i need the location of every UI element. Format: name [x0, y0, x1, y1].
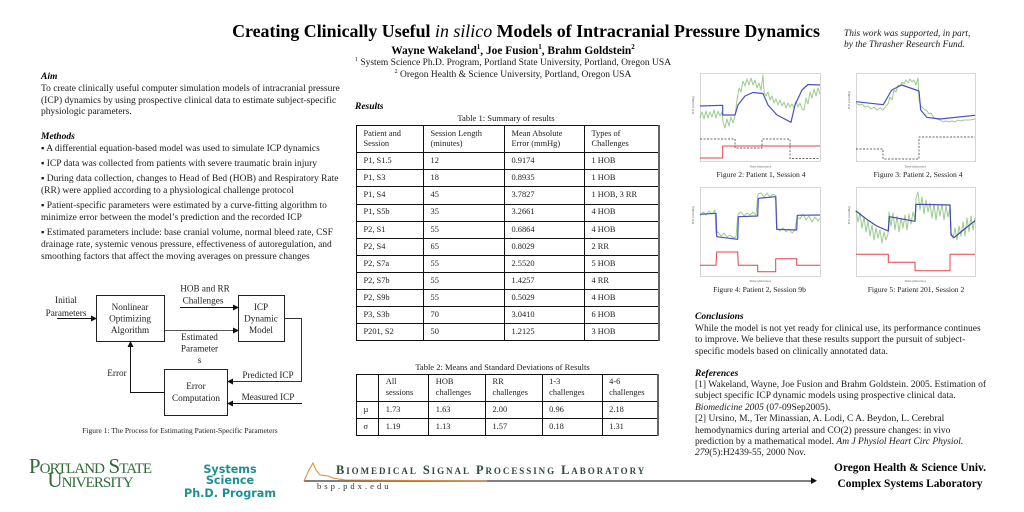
panel: references: References — [695, 368, 738, 378]
flow diagram: figure 1: Dynamic — [244, 314, 278, 324]
panel: methods — [40, 132, 339, 262]
logo: Systems Science Ph.D. Program: Systems — [203, 463, 257, 476]
table 1: summary of results: Error (mmHg) — [512, 139, 560, 148]
table 2: means and standard deviations: 1.19 — [386, 422, 400, 431]
table 1: summary of results: 3.7827 — [512, 190, 535, 199]
panel: methods: minimize error between the model’s prediction and the recorded ICP — [41, 213, 302, 223]
table 1: summary of results: 55 — [430, 293, 439, 302]
table 1: summary of results: 4 HOB — [592, 225, 615, 234]
OHSU lab label: Oregon Health & Science Univ. — [834, 462, 986, 474]
funding note: by the Thrasher Research Fund. — [844, 40, 965, 50]
flow diagram: figure 1: s — [198, 355, 202, 365]
table 1: summary of results: (minutes) — [430, 139, 463, 148]
logo: Systems Science Ph.D. Program: Ph.D. Program — [184, 487, 276, 500]
table 2 caption: Table 2: Means and Standard Deviations of Results — [415, 362, 590, 372]
table 1: summary of results: 4 RR — [592, 276, 609, 285]
table 2: means and standard deviations: 1.57 — [492, 422, 507, 431]
panel: conclusions: Conclusions — [695, 312, 744, 322]
panel: aim: (ICP) dynamics by using prospective clinical data to estimate subject-specific — [41, 96, 336, 106]
table 1: summary of results: 0.6864 — [512, 225, 535, 234]
table 1: summary of results: P1, S4 — [364, 190, 385, 199]
panel: references: hemodynamics during arterial and CO(2) pressure changes: in vivo — [695, 426, 950, 436]
logo: Portland State University — [29, 454, 152, 492]
table 1: summary of results: 3.2661 — [512, 207, 535, 216]
chart: figure 2: Time (minutes) — [749, 164, 772, 168]
table 1: summary of results: 3.0410 — [512, 310, 535, 319]
table 1: summary of results: 1 HOB, 3 RR — [592, 190, 637, 199]
table 2: means and standard deviations: HOB — [436, 377, 453, 386]
title: Creating Clinically Useful in silico Models of Intracranial Pressure Dynamics — [232, 21, 820, 41]
flow diagram: figure 1: Nonlinear — [112, 302, 148, 312]
table 1: summary of results: 4 HOB — [592, 293, 615, 302]
table 1: summary of results: 3 HOB — [592, 327, 615, 336]
affiliations: 1 System Science Ph.D. Program, Portland State University, Portland, Oregon USA — [355, 57, 671, 68]
table 1: summary of results: 35 — [430, 207, 439, 216]
logo: Portland State University: Portland State — [29, 454, 151, 478]
caption: figure 3: Figure 3: Patient 2, Session 4 — [873, 170, 962, 179]
table 1: summary of results: 12 — [430, 156, 439, 165]
table 2: means and standard deviations: challenges — [549, 388, 585, 397]
chart: figure 5 — [847, 188, 976, 283]
table 1: summary of results: 1 HOB — [592, 173, 615, 182]
table 2: means and standard deviations: 1.13 — [436, 422, 450, 431]
chart: figure 2 — [691, 74, 820, 168]
table 1: summary of results: P2, S9b — [364, 293, 390, 302]
table 1: summary of results: P1, S5b — [364, 207, 390, 216]
logo: Systems Science Ph.D. Program — [184, 463, 276, 500]
chart: figure 3: Time (minutes) — [904, 164, 927, 168]
affiliations: 2 Oregon Health & Science University, Portland, Oregon USA — [395, 69, 631, 80]
table 1: summary of results: 1 HOB — [592, 156, 615, 165]
lab url: bsp.pdx.edu — [317, 481, 392, 491]
chart: figure 2: ICP (mmHg) — [691, 95, 695, 114]
table 2: means and standard deviations: 2.00 — [492, 405, 507, 414]
table 1: summary of results: Challenges — [592, 139, 629, 148]
table 1: summary of results: Types of — [592, 129, 620, 138]
flow diagram: figure 1: Error — [107, 368, 127, 378]
panel: methods: ▪ ICP data was collected from patients with severe traumatic brain injury — [41, 159, 317, 169]
table 1: summary of results: P1, S1.5 — [364, 156, 392, 165]
chart: figure 5: ICP (mmHg) — [847, 205, 851, 224]
panel: methods: Methods — [41, 132, 75, 142]
panel: conclusions — [695, 312, 981, 356]
table 2: means and standard deviations: challenges — [436, 388, 471, 397]
table 1: summary of results: P2, S4 — [364, 242, 385, 251]
panel: references: Biomedicine 2005 (07-09Sep2005). — [695, 403, 830, 413]
panel: references: [2] Ursino, M., Ter Minassian, A. Lodi, C A. Beydon, L. Cerebral — [695, 414, 944, 424]
caption: figure 2: Figure 2: Patient 1, Session 4 — [716, 170, 806, 179]
table 1: summary of results: 6 HOB — [592, 310, 615, 319]
table 2: means and standard deviations: 0.96 — [549, 405, 564, 414]
table 2: means and standard deviations: 1.63 — [436, 405, 450, 414]
panel: conclusions: While the model is not yet ready for clinical use, its performance continues — [695, 324, 981, 334]
panel: methods: (RR) were applied according to a physiological challenge protocol — [41, 186, 294, 196]
chart: figure 5: Time (minutes) — [904, 279, 927, 283]
panel: methods: ▪ A differential equation-based model was used to simulate ICP dynamics — [41, 144, 320, 154]
OHSU lab label — [834, 462, 986, 490]
flow diagram: figure 1: HOB and RR — [180, 284, 231, 294]
panel: references: 279(5):H2439-55, 2000 Nov. — [695, 448, 806, 458]
table 1: summary of results: 0.9174 — [512, 156, 535, 165]
table 2: means and standard deviations: σ — [364, 422, 368, 431]
chart: figure 3: ICP (mmHg) — [847, 90, 851, 109]
table 1: summary of results: Patient and — [364, 129, 401, 138]
table 1: summary of results: 4 HOB — [592, 207, 615, 216]
panel: references: subject specific ICP dynamic models using prospective clinical data. — [695, 391, 956, 401]
table 1: summary of results: 65 — [430, 242, 439, 251]
flow diagram: figure 1: Algorithm — [111, 325, 149, 335]
table 1: summary of results: 50 — [430, 327, 439, 336]
table 2: means and standard deviations: 2.18 — [609, 405, 624, 414]
table 1: summary of results: Session Length — [430, 129, 482, 138]
panel: methods: ▪ During data collection, changes to Head of Bed (HOB) and Respiratory Rate — [41, 174, 339, 184]
affiliations — [355, 57, 672, 80]
caption: figure 5: Figure 5: Patient 201, Session 2 — [868, 285, 964, 294]
table 1: summary of results: 2.5520 — [512, 259, 535, 268]
authors: Wayne Wakeland1, Joe Fusion1, Brahm Goldstein2 — [391, 43, 635, 57]
table 1: summary of results: P2, S7b — [364, 276, 390, 285]
flow diagram: figure 1: Error — [186, 381, 206, 391]
panel: methods: drainage rate, systemic venous pressure, effectiveness of autoregulation, and — [41, 240, 332, 250]
table 2: means and standard deviations: RR — [492, 377, 504, 386]
logo: Systems Science Ph.D. Program: Science — [206, 474, 254, 486]
panel: aim — [40, 72, 340, 117]
results heading: Results — [355, 102, 384, 112]
flow diagram: figure 1: Optimizing — [109, 314, 151, 324]
flow diagram: figure 1: Challenges — [183, 296, 224, 306]
table 1: summary of results: P2, S7a — [364, 259, 389, 268]
flow diagram: figure 1: Initial — [55, 295, 77, 305]
panel: methods: smoothing factors that affect the moving averages on pressure changes — [41, 252, 310, 262]
table 1: summary of results: 45 — [430, 190, 439, 199]
funding note — [844, 29, 970, 50]
table 1: summary of results: Session — [364, 139, 389, 148]
table 1: summary of results: P1, S3 — [364, 173, 385, 182]
chart: figure 4: Time (minutes) — [749, 279, 772, 283]
table 1: summary of results: 5 HOB — [592, 259, 615, 268]
panel: references: [1] Wakeland, Wayne, Joe Fusion and Brahm Goldstein. 2005. Estimation of — [695, 380, 986, 390]
panel: references — [695, 368, 986, 458]
table 1: summary of results: 70 — [430, 310, 439, 319]
table 2: means and standard deviations — [356, 374, 659, 436]
table 2: means and standard deviations: All — [386, 377, 396, 386]
flow diagram: figure 1: Predicted ICP — [242, 370, 294, 380]
table 1: summary of results: 1.4257 — [512, 276, 535, 285]
caption: figure 4: Figure 4: Patient 2, Session 9b — [713, 285, 806, 294]
table 1: summary of results: P2, S1 — [364, 225, 385, 234]
table 1: summary of results: 18 — [430, 173, 439, 182]
table 1: summary of results: 2 RR — [592, 242, 609, 251]
flow diagram: figure 1: Parameter — [181, 344, 218, 354]
panel: aim: Aim — [41, 72, 57, 82]
table 1: summary of results: 1.2125 — [512, 327, 535, 336]
funding note: This work was supported, in part, — [844, 29, 970, 39]
flow diagram: figure 1: Estimated — [181, 332, 218, 342]
table 1: summary of results: 0.8029 — [512, 242, 535, 251]
panel: aim: physiologic parameters. — [41, 107, 132, 117]
table 1: summary of results: 55 — [430, 276, 439, 285]
table 2: means and standard deviations: challenges — [492, 388, 528, 397]
table 1: summary of results: 0.8935 — [512, 173, 535, 182]
panel: methods: ▪ Patient-specific parameters were estimated by a curve-fitting algorithm to — [41, 201, 327, 211]
chart: figure 4 — [691, 188, 820, 283]
table 2: means and standard deviations: challenges — [609, 388, 645, 397]
table 2: means and standard deviations: 1.73 — [386, 405, 400, 414]
table 2: means and standard deviations: 1.31 — [609, 422, 624, 431]
table 2: means and standard deviations: 1-3 — [549, 377, 560, 386]
panel: aim: To create clinically useful computer simulation models of intracranial pressure — [41, 84, 340, 94]
OHSU lab label: Complex Systems Laboratory — [838, 478, 982, 490]
table 1: summary of results — [356, 125, 660, 341]
panel: conclusions: to improve. We believe that these results support the pursuit of subject- — [695, 335, 965, 345]
panel: methods: ▪ Estimated parameters include: base cranial volume, normal bleed rate, CSF — [41, 228, 333, 238]
chart: figure 3 — [847, 74, 976, 168]
chart: figure 4: ICP (mmHg) — [691, 205, 695, 224]
flow diagram: figure 1: Measured ICP — [242, 392, 294, 402]
table 2: means and standard deviations: µ — [364, 405, 368, 414]
table 1: summary of results: P201, S2 — [364, 327, 394, 336]
panel: conclusions: specific models based on clinically annotated data. — [695, 346, 888, 356]
flow diagram: figure 1: Parameters — [46, 308, 87, 318]
table 2: means and standard deviations: sessions — [386, 388, 413, 397]
table 1: summary of results: 0.5029 — [512, 293, 535, 302]
flow diagram: figure 1: Computation — [172, 393, 220, 403]
table 1: summary of results: 55 — [430, 225, 439, 234]
logo: Portland State University: University — [47, 468, 133, 492]
table 1 caption: Table 1: Summary of results — [457, 113, 555, 123]
table 1: summary of results: 55 — [430, 259, 439, 268]
panel: references: prediction by a mathematical model. Am J Physiol Heart Circ Physiol. — [695, 437, 963, 447]
table 1: summary of results: P3, S3b — [364, 310, 390, 319]
flow diagram: figure 1: Model — [249, 325, 273, 335]
table 2: means and standard deviations: 4-6 — [609, 377, 620, 386]
lab name: Biomedical Signal Processing Laboratory — [336, 463, 646, 477]
table 2: means and standard deviations: 0.18 — [549, 422, 564, 431]
flow diagram: figure 1: ICP — [254, 302, 268, 312]
table 1: summary of results: Mean Absolute — [512, 129, 562, 138]
figure 1 caption: Figure 1: The Process for Estimating Patient-Specific Parameters — [82, 426, 278, 435]
